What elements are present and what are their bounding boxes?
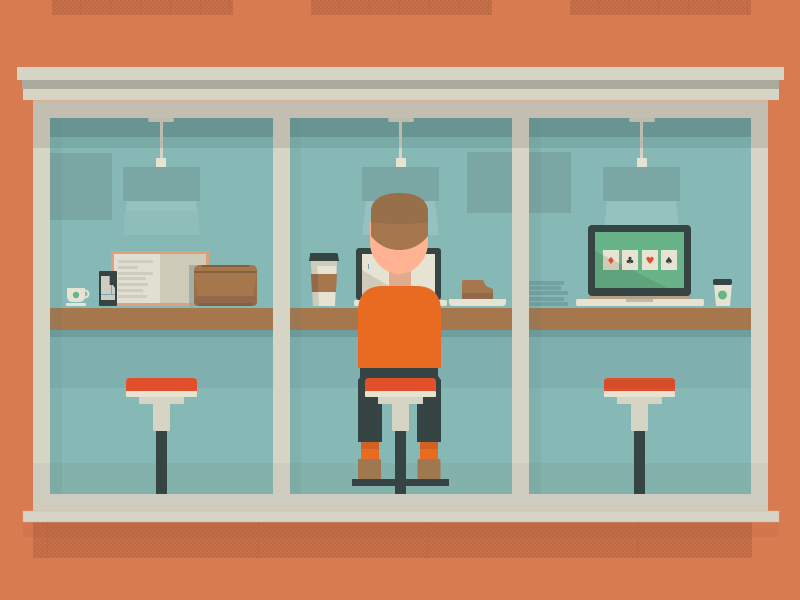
person seated on stool [358, 193, 441, 479]
panel: right window [529, 118, 751, 494]
leather bag [189, 265, 257, 306]
lamp ceiling mount [148, 118, 174, 148]
stacked papers [529, 281, 568, 306]
playing cards: ♦ [607, 256, 615, 267]
socks [361, 442, 438, 460]
smartphone [99, 271, 117, 306]
shoes [358, 459, 440, 479]
head [370, 222, 428, 274]
playing cards: ♠ [665, 256, 673, 267]
ceiling lamp [362, 122, 439, 235]
playing cards [603, 250, 677, 270]
lower wall shadow under sill [23, 522, 779, 558]
lamp ceiling mount [388, 118, 414, 148]
centre stool [352, 378, 449, 494]
trousers [358, 366, 441, 442]
plate with cake [449, 280, 506, 306]
lamp ceiling mount [629, 118, 655, 148]
stool [126, 378, 197, 494]
hair [371, 193, 428, 250]
upper floor window ledges [52, 0, 751, 15]
panel: centre window [290, 118, 512, 494]
takeaway cup with green logo [713, 279, 732, 306]
playing cards: ♣ [626, 256, 634, 267]
panel: left window [50, 118, 273, 494]
laptop with card game [576, 225, 704, 306]
window sill [23, 511, 779, 522]
orange sweater [358, 286, 441, 368]
takeaway coffee cup [309, 253, 339, 306]
stool [604, 378, 675, 494]
neck [389, 268, 411, 290]
laptop behind person [354, 248, 447, 306]
cornice [17, 67, 784, 101]
coffee cup and saucer [66, 288, 88, 306]
ceiling lamp [603, 122, 680, 235]
ceiling lamp [123, 122, 200, 235]
open book [111, 251, 209, 306]
window frame [33, 100, 768, 511]
playing cards: ♥ [646, 256, 655, 267]
